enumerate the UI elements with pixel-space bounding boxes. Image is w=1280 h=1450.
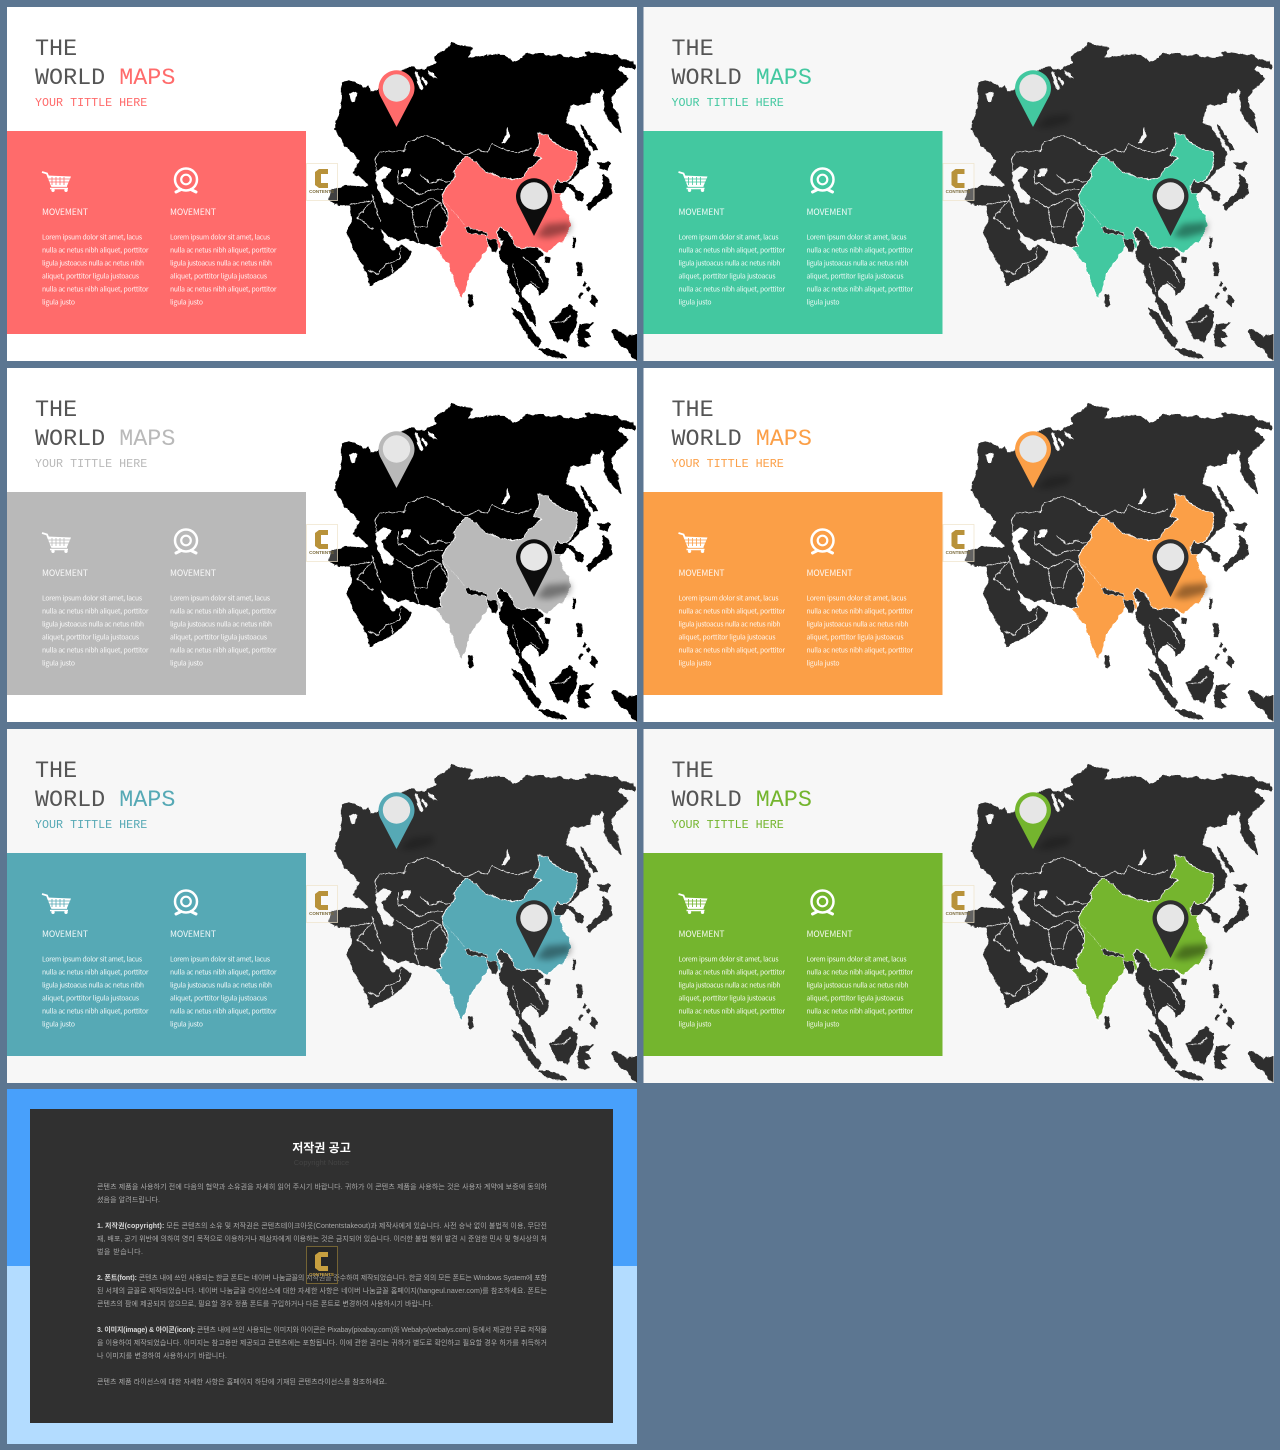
column text 1: Lorem ipsum dolor sit amet, lacus bbox=[42, 954, 142, 964]
column text 2: ligula justo bbox=[170, 296, 203, 306]
column text 2: Lorem ipsum dolor sit amet, lacus bbox=[170, 232, 270, 242]
panel: gray world map slide bbox=[7, 368, 637, 722]
column heading 1: MOVEMENT bbox=[678, 206, 724, 218]
asia map with highlighted countries bbox=[329, 43, 637, 360]
asia map with highlighted countries bbox=[966, 43, 1274, 360]
column text 1: nulla ac netus nibh aliquet, porttitor bbox=[678, 284, 785, 294]
heading: WORLD MAPS bbox=[35, 427, 175, 453]
column text 2: nulla ac netus nibh aliquet, porttitor bbox=[170, 1006, 277, 1016]
section 3: image and icon: 나 이미지를 변경하여 사용하시기 바랍니다. bbox=[97, 1351, 227, 1360]
column heading 2: MOVEMENT bbox=[170, 206, 216, 218]
watermark logo: CONTENTS bbox=[309, 550, 334, 555]
column text 2: ligula justoacus nulla ac netus nibh bbox=[806, 618, 908, 628]
asia map with highlighted countries bbox=[966, 765, 1274, 1082]
notice title: 저작권 공고 bbox=[292, 1140, 351, 1155]
column text 1: ligula justoacus nulla ac netus nibh bbox=[42, 980, 144, 990]
column text 1: ligula justo bbox=[42, 658, 75, 668]
column heading 1: MOVEMENT bbox=[42, 567, 88, 579]
column text 1: ligula justo bbox=[678, 296, 712, 306]
intro text bbox=[97, 1182, 548, 1204]
watermark logo bbox=[306, 886, 338, 922]
column text 1: aliquet, porttitor ligula justoacus bbox=[42, 270, 139, 280]
column text 1: nulla ac netus nibh aliquet, porttitor bbox=[42, 284, 149, 294]
watermark logo bbox=[943, 524, 974, 562]
column text 1: Lorem ipsum dolor sit amet, lacus bbox=[42, 232, 142, 242]
watermark logo bbox=[943, 886, 974, 922]
column text 2: nulla ac netus nibh aliquet, porttitor bbox=[806, 1006, 913, 1016]
column text 1: nulla ac netus nibh aliquet, porttitor bbox=[42, 244, 149, 254]
watermark logo bbox=[943, 164, 974, 200]
column text 1: ligula justoacus nulla ac netus nibh bbox=[678, 980, 780, 990]
column text 2: Lorem ipsum dolor sit amet, lacus bbox=[170, 954, 270, 964]
subtitle: YOUR TITTLE HERE bbox=[672, 457, 784, 471]
column text 2: ligula justo bbox=[170, 658, 203, 668]
panel background bbox=[7, 729, 637, 1083]
column text 2: aliquet, porttitor ligula justoacus bbox=[170, 992, 267, 1002]
icon: cart bbox=[42, 894, 71, 914]
section 1: copyright: 1. 저작권(copyright): 모든 콘텐츠의 소유 및 저작권은 콘텐츠테이크아웃(Contentstakeout)과 제작사에게 있습니다. 사전 승낙 없이 불법적 이용, 무단전 bbox=[97, 1221, 547, 1230]
map pin: dark bbox=[516, 178, 552, 236]
column heading 1: MOVEMENT bbox=[678, 567, 724, 579]
subtitle: YOUR TITTLE HERE bbox=[672, 818, 784, 832]
notice subtitle: Copyright Notice bbox=[294, 1158, 349, 1167]
section 2: font: 콘텐츠의 팜에 제공되지 않으므로, 필요할 경우 정품 폰트를 구입하거나 다른 폰트로 변경하여 사용하시기 바랍니다. bbox=[97, 1299, 433, 1308]
heading: WORLD MAPS bbox=[35, 788, 175, 814]
heading bbox=[672, 398, 812, 453]
section 2: font: 2. 폰트(font): 콘텐츠 내에 쓰인 사용되는 한글 폰트는 네이버 나눔글꼴의 저작권을 준수하여 제작되었습니다. 한글 외의 모든 폰트는 Windows System에 포함 bbox=[97, 1273, 548, 1282]
panel: lime world map slide bbox=[644, 729, 1274, 1083]
column text 1: aliquet, porttitor ligula justoacus bbox=[42, 632, 139, 642]
panel: teal world map slide bbox=[7, 729, 637, 1083]
map pin: dark bbox=[1152, 539, 1188, 597]
heading: THE bbox=[35, 398, 77, 424]
column text 1: ligula justo bbox=[42, 296, 75, 306]
column text 2 bbox=[806, 954, 913, 1028]
colored info card bbox=[7, 492, 306, 695]
heading bbox=[672, 37, 812, 92]
map pin: accent bbox=[378, 70, 414, 127]
column text 1: aliquet, porttitor ligula justoacus bbox=[678, 270, 776, 280]
column text 2: aliquet, porttitor ligula justoacus bbox=[806, 992, 904, 1002]
column text 1: ligula justoacus nulla ac netus nibh bbox=[42, 258, 144, 268]
watermark logo: CONTENTS bbox=[309, 189, 334, 194]
column text 2: ligula justo bbox=[806, 658, 840, 668]
heading bbox=[672, 759, 812, 814]
column text 2: nulla ac netus nibh aliquet, porttitor bbox=[806, 966, 913, 976]
column text 2: aliquet, porttitor ligula justoacus bbox=[806, 632, 904, 642]
section 3: image and icon: 을 이용하여 제작되었습니다. 이미지는 참고용만 제공되고 콘텐츠에는 포함됩니다. 이에 관한 권리는 귀하가 별도로 확인하고 필요할 경우 허가를 취득하거 bbox=[97, 1338, 547, 1347]
panel background bbox=[644, 7, 1274, 361]
section 1: copyright bbox=[97, 1221, 547, 1256]
column text 2 bbox=[170, 954, 277, 1028]
subtitle: YOUR TITTLE HERE bbox=[35, 96, 147, 110]
asia map with highlighted countries bbox=[329, 404, 637, 721]
section 2: font bbox=[97, 1273, 548, 1308]
icon: cart bbox=[678, 533, 708, 553]
heading: THE bbox=[35, 759, 77, 785]
column text 1: ligula justoacus nulla ac netus nibh bbox=[42, 618, 144, 628]
column heading 1: MOVEMENT bbox=[42, 206, 88, 218]
panel background bbox=[7, 7, 637, 361]
panel: green world map slide bbox=[644, 7, 1274, 361]
icon: cart bbox=[42, 533, 71, 553]
column text 2: nulla ac netus nibh aliquet, porttitor bbox=[170, 644, 277, 654]
panel: orange world map slide bbox=[644, 368, 1274, 722]
column text 2: ligula justoacus nulla ac netus nibh bbox=[170, 618, 272, 628]
column text 2: aliquet, porttitor ligula justoacus bbox=[170, 270, 267, 280]
map pin: accent bbox=[1015, 792, 1051, 849]
section 3: image and icon bbox=[97, 1325, 548, 1360]
column text 1: ligula justo bbox=[42, 1018, 75, 1028]
section 3: image and icon: 3. 이미지(image) & 아이콘(icon): 콘텐츠 내에 쓰인 사용되는 이미지와 아이콘은 Pixabay(pixabay.com)와 Webalys(webalys.com) 등에서 제공한 무료 저작물 bbox=[97, 1325, 548, 1334]
map pin: dark bbox=[516, 539, 552, 597]
watermark logo: CONTENTS bbox=[946, 189, 970, 194]
map pin: accent bbox=[1015, 70, 1051, 127]
pin shadows bbox=[399, 475, 571, 599]
icon: cart bbox=[42, 172, 71, 192]
colored info card bbox=[644, 853, 942, 1056]
light blue lower background bbox=[7, 1266, 637, 1444]
column text 2: ligula justoacus nulla ac netus nibh bbox=[806, 980, 908, 990]
icon: target bbox=[175, 168, 197, 192]
icon: target bbox=[175, 890, 197, 914]
heading bbox=[35, 759, 175, 814]
subtitle: YOUR TITTLE HERE bbox=[672, 96, 784, 110]
pin shadows bbox=[1036, 836, 1208, 960]
colored info card bbox=[7, 131, 306, 334]
column text 2: nulla ac netus nibh aliquet, porttitor bbox=[806, 244, 913, 254]
column text 1 bbox=[42, 592, 149, 668]
heading: THE bbox=[35, 37, 77, 63]
watermark logo: CONTENTS bbox=[309, 1272, 334, 1277]
panel background bbox=[644, 729, 1274, 1083]
colored info card bbox=[7, 853, 306, 1056]
icon: cart bbox=[678, 894, 708, 914]
column text 2: aliquet, porttitor ligula justoacus bbox=[170, 632, 267, 642]
icon: target bbox=[812, 890, 834, 914]
column text 1: nulla ac netus nibh aliquet, porttitor bbox=[678, 1006, 785, 1016]
column text 2 bbox=[806, 232, 913, 306]
map pin: accent bbox=[1015, 431, 1051, 488]
column text 2: Lorem ipsum dolor sit amet, lacus bbox=[806, 592, 906, 602]
watermark logo bbox=[306, 524, 338, 562]
column text 2 bbox=[170, 232, 277, 306]
column text 2: ligula justo bbox=[170, 1018, 203, 1028]
column text 2: ligula justoacus nulla ac netus nibh bbox=[806, 258, 908, 268]
heading bbox=[35, 398, 175, 453]
column text 1 bbox=[42, 954, 149, 1028]
map pin: dark bbox=[1152, 178, 1188, 236]
section 2: font: 된 서체의 글꼴로 제작되었습니다. 네이버 나눔글꼴 라이선스에 대한 자세한 사항은 네이버 나눔글꼴 홈페이지(hangeul.naver.com)를 참조하세요. 폰트는 bbox=[97, 1286, 548, 1295]
intro text: 셨음을 알려드립니다. bbox=[97, 1195, 160, 1204]
column text 2: ligula justoacus nulla ac netus nibh bbox=[170, 980, 272, 990]
map pin: dark bbox=[1152, 900, 1188, 958]
heading: THE bbox=[672, 398, 714, 424]
column text 2: ligula justo bbox=[806, 296, 840, 306]
icon: target bbox=[812, 530, 834, 553]
dark notice card bbox=[30, 1109, 613, 1423]
panel background bbox=[7, 368, 637, 722]
column text 2: ligula justoacus nulla ac netus nibh bbox=[170, 258, 272, 268]
column text 1: nulla ac netus nibh aliquet, porttitor bbox=[42, 966, 149, 976]
column heading 1: MOVEMENT bbox=[42, 928, 88, 940]
column text 1: Lorem ipsum dolor sit amet, lacus bbox=[42, 592, 142, 602]
column text 2: nulla ac netus nibh aliquet, porttitor bbox=[806, 284, 913, 294]
pin shadows bbox=[399, 114, 571, 238]
closing text: 콘텐츠 제품 라이선스에 대한 자세한 사항은 홈페이지 하단에 기재된 콘텐츠라이선스를 참조하세요. bbox=[97, 1377, 387, 1386]
icon: cart bbox=[678, 172, 708, 192]
heading: THE bbox=[672, 759, 714, 785]
column text 2: Lorem ipsum dolor sit amet, lacus bbox=[170, 592, 270, 602]
column text 2 bbox=[170, 592, 277, 668]
map pin: accent bbox=[378, 792, 414, 849]
column text 2: nulla ac netus nibh aliquet, porttitor bbox=[170, 966, 277, 976]
column text 1: nulla ac netus nibh aliquet, porttitor bbox=[42, 1006, 149, 1016]
panel: red world map slide bbox=[7, 7, 637, 361]
column heading 2: MOVEMENT bbox=[806, 206, 852, 218]
heading: WORLD MAPS bbox=[672, 788, 812, 814]
column text 1: aliquet, porttitor ligula justoacus bbox=[678, 632, 776, 642]
column text 1 bbox=[42, 232, 149, 306]
column text 1: nulla ac netus nibh aliquet, porttitor bbox=[42, 606, 149, 616]
watermark logo bbox=[306, 1246, 338, 1284]
panel: copyright notice bbox=[7, 1089, 637, 1444]
column text 2 bbox=[806, 592, 913, 668]
asia map with highlighted countries bbox=[966, 404, 1274, 721]
column text 1: nulla ac netus nibh aliquet, porttitor bbox=[678, 966, 785, 976]
column text 1: ligula justoacus nulla ac netus nibh bbox=[678, 258, 780, 268]
heading: WORLD MAPS bbox=[672, 427, 812, 453]
column text 1 bbox=[678, 954, 785, 1028]
heading: THE bbox=[672, 37, 714, 63]
panel background bbox=[644, 368, 1274, 722]
subtitle: YOUR TITTLE HERE bbox=[35, 818, 147, 832]
column text 1: ligula justoacus nulla ac netus nibh bbox=[678, 618, 780, 628]
heading bbox=[35, 37, 175, 92]
section 1: copyright: 재, 배포, 공기 위반에 의하여 영리 목적으로 이용하거나 제삼자에게 이용하는 것은 금지되어 있습니다. 이러한 불법 행위 발견 시 준엄한 민사 및 형사상의 처 bbox=[97, 1234, 547, 1243]
map pin: dark bbox=[516, 900, 552, 958]
map pin: accent bbox=[378, 431, 414, 488]
column heading 2: MOVEMENT bbox=[806, 928, 852, 940]
column text 2: nulla ac netus nibh aliquet, porttitor bbox=[170, 606, 277, 616]
subtitle: YOUR TITTLE HERE bbox=[35, 457, 147, 471]
section 1: copyright: 벌을 받습니다. bbox=[97, 1247, 143, 1256]
column text 1: Lorem ipsum dolor sit amet, lacus bbox=[678, 592, 778, 602]
column text 1: ligula justo bbox=[678, 1018, 712, 1028]
heading: WORLD MAPS bbox=[35, 66, 175, 92]
watermark logo: CONTENTS bbox=[946, 550, 970, 555]
column text 1: Lorem ipsum dolor sit amet, lacus bbox=[678, 954, 778, 964]
column heading 1: MOVEMENT bbox=[678, 928, 724, 940]
column text 2: ligula justo bbox=[806, 1018, 840, 1028]
watermark logo: CONTENTS bbox=[309, 911, 334, 916]
column heading 2: MOVEMENT bbox=[806, 567, 852, 579]
column text 1: Lorem ipsum dolor sit amet, lacus bbox=[678, 232, 778, 242]
watermark logo: CONTENTS bbox=[946, 911, 970, 916]
colored info card bbox=[644, 131, 942, 334]
column text 2: nulla ac netus nibh aliquet, porttitor bbox=[170, 284, 277, 294]
heading: WORLD MAPS bbox=[672, 66, 812, 92]
column heading 2: MOVEMENT bbox=[170, 567, 216, 579]
icon: target bbox=[175, 530, 197, 553]
pin shadows bbox=[1036, 475, 1208, 599]
icon: target bbox=[812, 168, 834, 192]
column text 1: aliquet, porttitor ligula justoacus bbox=[678, 992, 776, 1002]
column text 1: nulla ac netus nibh aliquet, porttitor bbox=[678, 644, 785, 654]
column text 1 bbox=[678, 592, 785, 668]
blue upper background bbox=[7, 1089, 637, 1266]
column text 2: nulla ac netus nibh aliquet, porttitor bbox=[170, 244, 277, 254]
column text 1: nulla ac netus nibh aliquet, porttitor bbox=[42, 644, 149, 654]
column text 2: aliquet, porttitor ligula justoacus bbox=[806, 270, 904, 280]
asia map with highlighted countries bbox=[329, 765, 637, 1082]
column text 1: nulla ac netus nibh aliquet, porttitor bbox=[678, 606, 785, 616]
column text 1: aliquet, porttitor ligula justoacus bbox=[42, 992, 139, 1002]
pin shadows bbox=[1036, 114, 1208, 238]
column text 1: ligula justo bbox=[678, 658, 712, 668]
column text 2: Lorem ipsum dolor sit amet, lacus bbox=[806, 954, 906, 964]
column heading 2: MOVEMENT bbox=[170, 928, 216, 940]
colored info card bbox=[644, 492, 942, 695]
column text 2: Lorem ipsum dolor sit amet, lacus bbox=[806, 232, 906, 242]
column text 1: nulla ac netus nibh aliquet, porttitor bbox=[678, 244, 785, 254]
column text 1 bbox=[678, 232, 785, 306]
watermark logo bbox=[306, 164, 338, 200]
column text 2: nulla ac netus nibh aliquet, porttitor bbox=[806, 644, 913, 654]
column text 2: nulla ac netus nibh aliquet, porttitor bbox=[806, 606, 913, 616]
pin shadows bbox=[399, 836, 571, 960]
intro text: 콘텐츠 제품을 사용하기 전에 다음의 협약과 소유권을 자세히 읽어 주시기 바랍니다. 귀하가 이 콘텐츠 제품을 사용하는 것은 사용자 계약에 보증에 동의하 bbox=[97, 1182, 548, 1191]
